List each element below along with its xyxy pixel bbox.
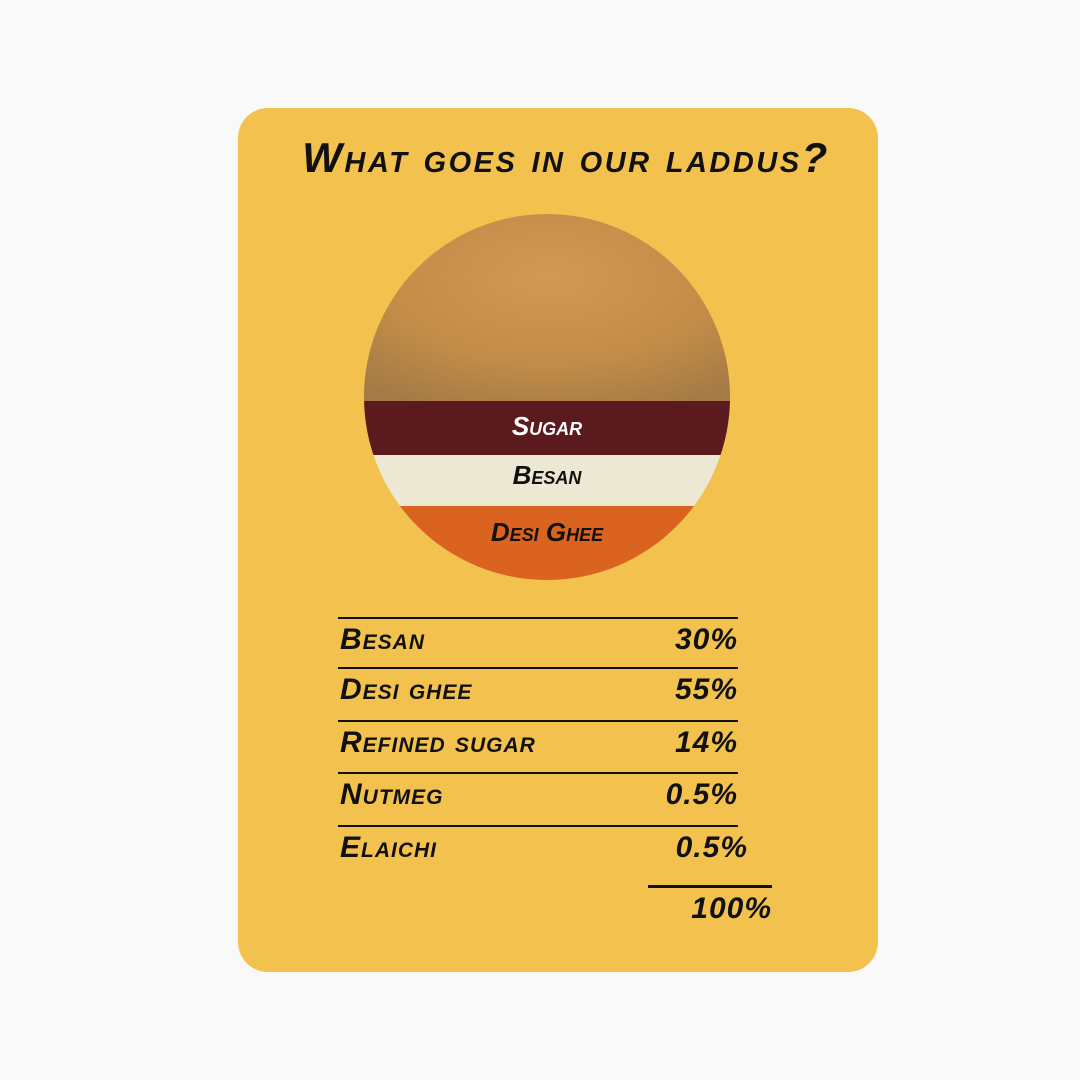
band: besan	[360, 455, 740, 506]
text: Nutmeg	[340, 778, 444, 811]
card	[238, 108, 878, 972]
laddu photo top	[360, 210, 740, 402]
text: 0.5%	[676, 831, 748, 864]
band: desi ghee	[400, 506, 694, 580]
text: Desi ghee	[340, 673, 472, 706]
table: ingredients	[338, 617, 748, 864]
laddu circle chart: Desi Ghee	[491, 517, 604, 547]
total: 100%	[691, 892, 772, 925]
laddu circle chart: Besan	[513, 460, 582, 490]
text: Besan	[340, 623, 425, 656]
laddu circle chart	[364, 214, 730, 580]
text: 0.5%	[666, 778, 738, 811]
title: What goes in our laddus?	[302, 134, 830, 181]
text: 55%	[675, 673, 738, 706]
text: Elaichi	[340, 831, 437, 864]
text: Refined sugar	[340, 726, 536, 759]
text: 14%	[675, 726, 738, 759]
band: sugar	[360, 401, 740, 455]
total	[648, 885, 772, 926]
text: 30%	[675, 623, 738, 656]
laddu circle chart: Sugar	[512, 411, 582, 441]
